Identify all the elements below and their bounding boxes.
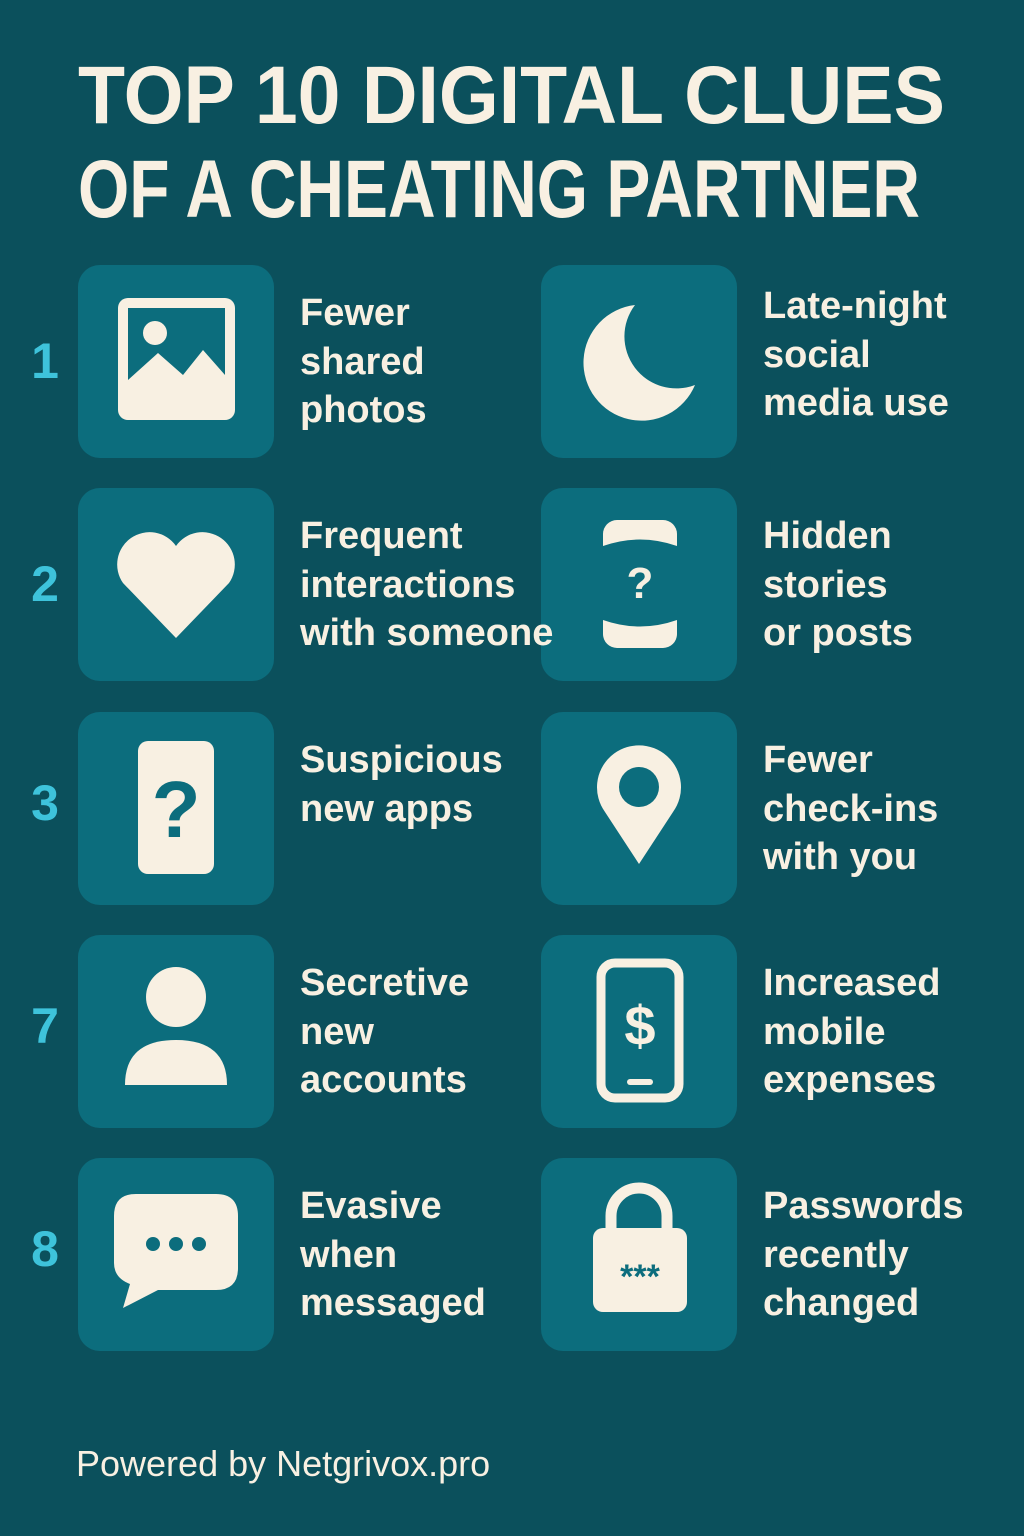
text: hidden stories: or posts: [763, 612, 913, 654]
text: fewer shared photos: shared: [300, 340, 425, 382]
tile: padlock icon: ***: [620, 1258, 661, 1296]
tile: question card icon: [78, 712, 274, 905]
text: passwords changed: recently: [763, 1234, 909, 1276]
text: fewer shared photos: photos: [300, 389, 427, 431]
text: frequent interactions: with someone: [300, 612, 553, 654]
text: frequent interactions: Frequent: [300, 515, 463, 557]
tile: phone question icon: ?: [627, 559, 653, 608]
tile: phone question icon: [541, 488, 737, 681]
tile: heart icon: [78, 488, 274, 681]
tile: phone dollar icon: $: [624, 994, 656, 1057]
title: [78, 50, 945, 235]
number 7: 7: [31, 998, 59, 1054]
text: secretive new accounts: new: [300, 1010, 374, 1052]
tile: moon icon: [541, 265, 737, 458]
text: fewer check-ins: with you: [763, 836, 917, 878]
number 8: 8: [31, 1221, 59, 1277]
tile: person icon: [78, 935, 274, 1128]
text: suspicious new apps: Suspicious: [300, 739, 503, 781]
text: frequent interactions: [300, 515, 553, 654]
tile: photo icon: [78, 265, 274, 458]
text: frequent interactions: interactions: [300, 564, 515, 606]
tile: padlock icon: [541, 1158, 737, 1351]
text: evasive when messaged: messaged: [300, 1282, 486, 1324]
text: hidden stories: [763, 515, 913, 654]
tile: location pin icon: [541, 712, 737, 905]
text: passwords changed: changed: [763, 1282, 919, 1324]
text: late-night social media use: Late-night: [763, 285, 947, 327]
text: hidden stories: Hidden: [763, 515, 892, 557]
text: increased mobile expenses: Increased: [763, 962, 940, 1004]
text: increased mobile expenses: expenses: [763, 1059, 936, 1101]
footer: Powered by Netgrivox.pro: [76, 1443, 490, 1484]
text: evasive when messaged: Evasive: [300, 1185, 442, 1227]
text: secretive new accounts: accounts: [300, 1059, 467, 1101]
number 2: 2: [31, 556, 59, 612]
title: TOP 10 DIGITAL CLUES: [78, 50, 945, 141]
text: fewer check-ins: Fewer: [763, 739, 873, 781]
text: evasive when messaged: [300, 1185, 486, 1324]
text: late-night social media use: [763, 285, 949, 424]
text: fewer check-ins: check-ins: [763, 788, 938, 830]
text: fewer shared photos: Fewer: [300, 292, 410, 334]
tile: chat bubble icon: [78, 1158, 274, 1351]
text: increased mobile expenses: [763, 962, 940, 1101]
text: passwords changed: Passwords: [763, 1185, 964, 1227]
text: fewer shared photos: [300, 292, 427, 431]
text: fewer check-ins: [762, 739, 938, 878]
text: suspicious new apps: [300, 739, 503, 830]
text: late-night social media use: social: [763, 334, 871, 376]
text: evasive when messaged: when: [300, 1234, 397, 1276]
text: late-night social media use: media use: [763, 382, 949, 424]
text: secretive new accounts: [300, 962, 469, 1101]
tile: question card icon: ?: [152, 765, 200, 854]
text: passwords changed: [763, 1185, 964, 1324]
text: increased mobile expenses: mobile: [763, 1010, 885, 1052]
text: suspicious new apps: new apps: [300, 788, 473, 830]
text: hidden stories: stories: [763, 564, 888, 606]
number 1: 1: [31, 333, 59, 389]
text: secretive new accounts: Secretive: [300, 962, 469, 1004]
tile: phone dollar icon: [541, 935, 737, 1128]
number 3: 3: [31, 775, 59, 831]
